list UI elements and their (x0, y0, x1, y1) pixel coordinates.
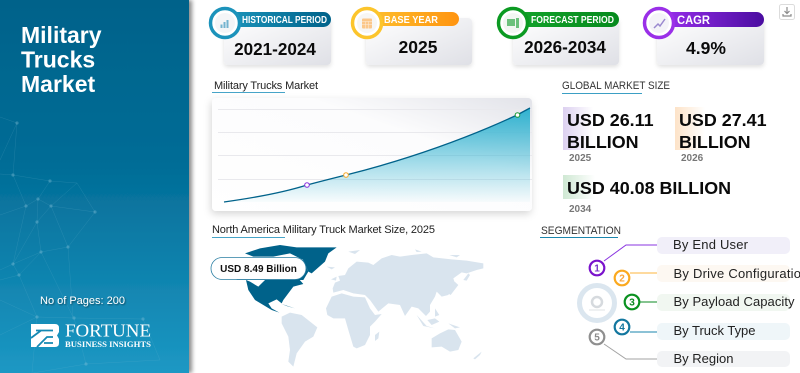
world map (237, 245, 483, 367)
segment 5 (590, 330, 790, 367)
icon: growth chart (644, 8, 674, 38)
segment 2 (615, 265, 800, 285)
North America highlighted (237, 245, 337, 313)
segment 1: 1 (594, 264, 600, 274)
value: 2021-2024 (234, 40, 316, 59)
marker: 2026 (344, 173, 348, 177)
heading: historical period: HISTORICAL PERIOD (242, 15, 327, 26)
stat: 2025 market size: BILLION (567, 132, 639, 152)
icon: bar chart (210, 8, 240, 38)
stat: 2025 market size: USD 26.11 (567, 110, 654, 130)
stat: 2025 market size (563, 107, 654, 164)
growth line (224, 108, 530, 202)
callout: north america value (211, 258, 306, 280)
segment 3 (625, 294, 795, 311)
stat: 2034 market size: 2034 (569, 204, 592, 215)
segment 3: 3 (629, 298, 635, 308)
eastern hemisphere (326, 249, 483, 359)
heading: north america market size: North America Military Truck Market Size, 2025 (212, 224, 435, 236)
stat: 2026 market size: BILLION (679, 132, 751, 152)
marker: 2034 (515, 113, 520, 117)
stat: 2026 market size: 2026 (681, 153, 704, 164)
segment 3: By Payload Capacity (674, 294, 795, 309)
heading: forecast period: FORECAST PERIOD (531, 15, 614, 26)
heading: military trucks market: Military Trucks Market (214, 80, 318, 92)
marker: 2025 (305, 183, 309, 187)
value: 4.9% (686, 38, 726, 58)
segment 1 (590, 237, 790, 275)
area under curve (224, 108, 530, 202)
South America (282, 313, 317, 367)
panel: sidebar (0, 0, 189, 373)
heading: global market size: GLOBAL MARKET SIZE (562, 80, 670, 92)
segment 5: By Region (674, 351, 734, 366)
page count: No of Pages: 200 (40, 295, 125, 307)
panel: CAGR (644, 8, 764, 65)
stat: 2026 market size: USD 27.41 (679, 110, 767, 130)
value: 2025 (399, 37, 438, 57)
title: Market (21, 71, 95, 97)
stat: 2025 market size: 2025 (569, 153, 592, 164)
segment 4 (615, 320, 790, 340)
callout: north america value: USD 8.49 Billion (220, 264, 297, 275)
title: Trucks (21, 46, 95, 72)
logo: Fortune Business Insights: BUSINESS INSIGHTS (65, 339, 151, 349)
icon: download (780, 4, 794, 20)
heading: base year: BASE YEAR (384, 15, 439, 26)
icon: forecast screen (498, 8, 528, 38)
segment 1: By End User (673, 237, 749, 252)
value: 2026-2034 (524, 38, 606, 57)
heading: CAGR: CAGR (677, 13, 710, 27)
stat: 2034 market size: USD 40.08 BILLION (567, 178, 731, 198)
segment 4: 4 (619, 322, 625, 334)
segment 2: 2 (619, 274, 625, 284)
stat: 2026 market size (675, 107, 767, 164)
panel: historical period (210, 8, 331, 65)
panel: base year (352, 8, 472, 65)
logo: Fortune Business Insights (31, 320, 151, 349)
heading: segmentation: SEGMENTATION (541, 225, 621, 237)
Americas (237, 245, 337, 367)
line chart: market growth (212, 98, 532, 211)
icon: calendar (352, 8, 382, 38)
segmentation hub icon (580, 286, 614, 320)
segment 5: 5 (594, 332, 600, 344)
title: Military (21, 22, 102, 48)
logo: Fortune Business Insights: FORTUNE (65, 320, 151, 340)
segment 4: By Truck Type (674, 323, 756, 338)
stat: 2034 market size (563, 175, 731, 215)
panel: forecast period (498, 8, 619, 65)
